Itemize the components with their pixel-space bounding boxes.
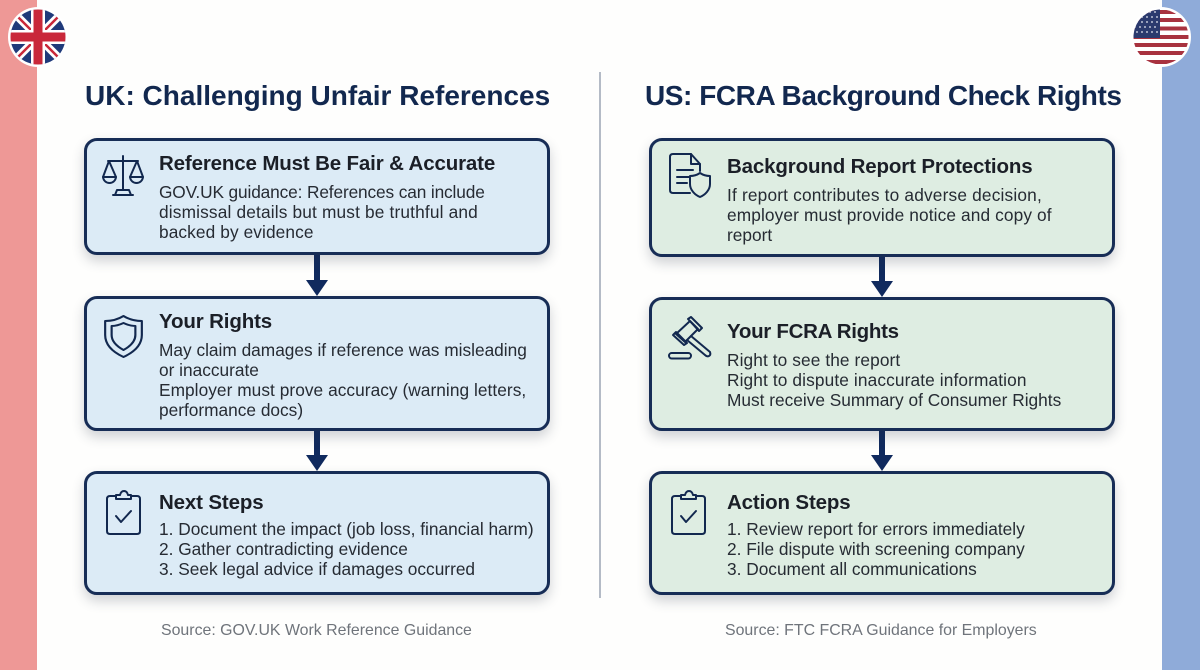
source: US: Source: FTC FCRA Guidance for Employers xyxy=(725,622,1037,639)
body text: 1. Document the impact (job loss, financial harm) xyxy=(159,519,534,539)
heading: UK: UK: Challenging Unfair References xyxy=(85,80,550,111)
body text: Right to dispute inaccurate information xyxy=(727,370,1027,390)
body text: Must receive Summary of Consumer Rights xyxy=(727,390,1061,410)
body text: May claim damages if reference was misleading xyxy=(159,340,527,360)
body text: report xyxy=(727,225,772,245)
arrow: UK 2 to 3 xyxy=(306,431,328,471)
body text: Employer must prove accuracy (warning letters, xyxy=(159,380,526,400)
body text: employer must provide notice and copy of xyxy=(727,205,1052,225)
icon: gavel xyxy=(668,316,712,360)
body text xyxy=(727,185,1052,245)
body text xyxy=(159,182,485,242)
body text: Right to see the report xyxy=(727,350,900,370)
panel: reference must be fair xyxy=(84,138,550,255)
source: UK: Source: GOV.UK Work Reference Guidance xyxy=(161,622,472,639)
body text: GOV.UK guidance: References can include xyxy=(159,182,485,202)
body text: 3. Seek legal advice if damages occurred xyxy=(159,559,475,579)
panel: your rights xyxy=(84,296,550,431)
body text: 3. Document all communications xyxy=(727,559,977,579)
blue side band xyxy=(1162,0,1200,670)
red side band xyxy=(0,0,37,670)
icon: clipboard xyxy=(106,490,141,535)
heading: Your Rights xyxy=(159,310,272,333)
body text: dismissal details but must be truthful and xyxy=(159,202,478,222)
panel: your FCRA rights xyxy=(649,297,1115,431)
body text xyxy=(727,350,1061,410)
body text: performance docs) xyxy=(159,400,303,420)
heading: Background Report Protections xyxy=(727,155,1032,178)
body text: backed by evidence xyxy=(159,222,314,242)
icon: shield xyxy=(104,315,143,358)
panel: background report protections xyxy=(649,138,1115,257)
body text xyxy=(159,340,527,420)
heading: US: US: FCRA Background Check Rights xyxy=(645,80,1121,111)
heading: Next Steps xyxy=(159,491,263,514)
icon: clipboard xyxy=(671,490,706,535)
icon: US flag xyxy=(1134,7,1191,67)
arrow: US 2 to 3 xyxy=(871,431,893,471)
panel: next steps xyxy=(84,471,550,595)
body text: 2. Gather contradicting evidence xyxy=(159,539,408,559)
heading: Action Steps xyxy=(727,491,850,514)
body text xyxy=(159,519,534,579)
panel: action steps xyxy=(649,471,1115,595)
body text: 2. File dispute with screening company xyxy=(727,539,1025,559)
centre divider xyxy=(599,72,601,598)
icon: scales xyxy=(102,155,144,196)
body text: or inaccurate xyxy=(159,360,259,380)
arrow: UK 1 to 2 xyxy=(306,255,328,296)
icon: document with shield xyxy=(669,153,711,198)
arrow: US 1 to 2 xyxy=(871,257,893,297)
heading: Reference Must Be Fair & Accurate xyxy=(159,152,495,175)
heading: Your FCRA Rights xyxy=(727,320,899,343)
body text: If report contributes to adverse decision, xyxy=(727,185,1042,205)
body text xyxy=(727,519,1025,579)
icon: UK flag xyxy=(8,7,66,67)
body text: 1. Review report for errors immediately xyxy=(727,519,1025,539)
